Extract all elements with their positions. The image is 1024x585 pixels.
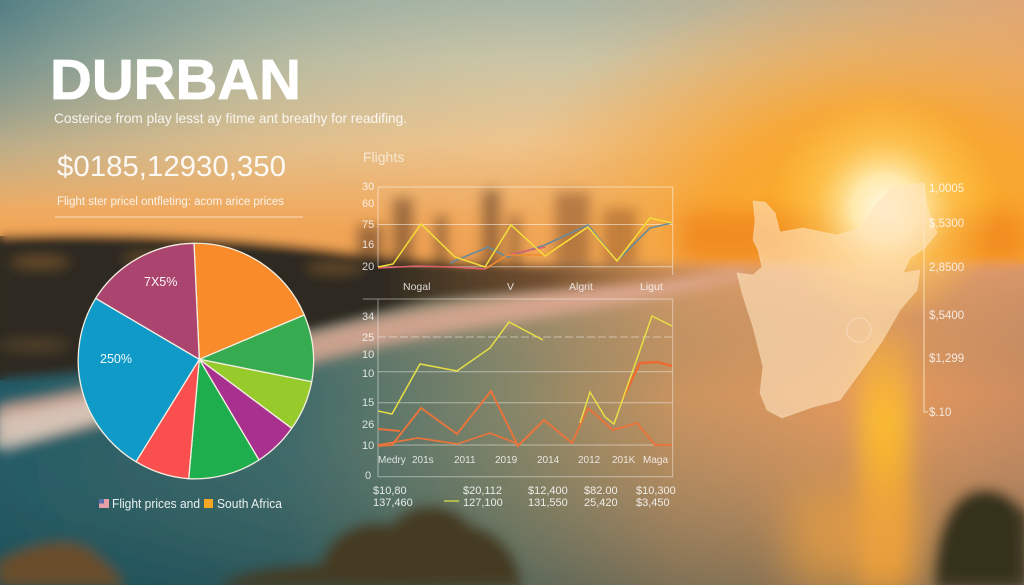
y axis labels: 10: [362, 440, 374, 452]
x axis labels: 201s: [412, 455, 434, 466]
map price scale: 1,0005: [929, 183, 964, 195]
x axis labels: 2012: [578, 455, 601, 466]
price table under chart: $20,112: [463, 485, 502, 497]
series: orange upper: [623, 362, 672, 398]
map price scale: $,5400: [929, 310, 964, 322]
y axis labels: [362, 311, 374, 482]
x axis labels: 2019: [495, 455, 518, 466]
price table under chart: $3,450: [636, 497, 670, 509]
series: yellow: [378, 218, 672, 267]
map price scale: $.10: [929, 407, 951, 419]
price table under chart: $12,400: [528, 485, 568, 497]
slice: purple: [199, 359, 292, 460]
y axis labels: 0: [365, 470, 371, 482]
pie legend: [99, 497, 282, 511]
pie legend: Flight prices and: [112, 497, 200, 511]
South Africa map: [737, 183, 937, 418]
pie label: maroon slice: 7X5%: [144, 275, 177, 289]
title: DURBAN: [50, 48, 301, 112]
x axis labels: 2014: [537, 455, 560, 466]
map price scale: 2,8500: [929, 262, 964, 274]
price table under chart: $10,300: [636, 485, 676, 497]
price table under chart: 127,100: [463, 497, 503, 509]
slice: green upper: [199, 315, 314, 382]
x axis labels: Ligut: [640, 281, 663, 293]
upper line chart heading: Flights: [363, 149, 404, 165]
series: orange thin: [378, 433, 518, 445]
x axis labels: [403, 281, 663, 293]
slice: lime: [199, 359, 312, 428]
series: orange stub: [378, 429, 400, 431]
y axis labels: 34: [362, 311, 374, 323]
map price scale: $1,299: [929, 353, 964, 365]
legend line: [444, 500, 459, 502]
slice: green lower: [189, 359, 259, 479]
slice: blue: [78, 298, 199, 462]
y axis labels: 15: [362, 397, 374, 409]
y axis labels: 60: [362, 198, 374, 210]
upper line chart: [362, 181, 673, 293]
series: yellow left: [378, 322, 543, 414]
icon: flag: [99, 499, 109, 508]
pie legend: South Africa: [217, 497, 282, 511]
series: yellow right: [580, 316, 672, 424]
icon: legend swatch: [204, 499, 213, 508]
x axis labels: V: [507, 281, 514, 293]
y axis labels: 30: [362, 181, 374, 193]
series: grey-blue: [450, 223, 672, 263]
map price scale: $,5300: [929, 218, 964, 230]
slice: maroon: [96, 243, 199, 359]
slice: red: [136, 359, 199, 479]
x axis labels: 2011: [454, 455, 476, 466]
price table under chart: 137,460: [373, 497, 413, 509]
x axis labels: Nogal: [403, 281, 430, 293]
price caption: Flight ster pricel ontfleting: acom arice prices: [57, 196, 284, 208]
map marker ring: [847, 318, 871, 342]
headline price: $0185,12930,350: [57, 151, 286, 183]
y axis labels: 26: [362, 419, 374, 431]
series: orange: [487, 218, 672, 268]
x axis labels: Maga: [643, 455, 668, 466]
y axis labels: 10: [362, 349, 374, 361]
y axis labels: 16: [362, 239, 374, 251]
y axis labels: 10: [362, 368, 374, 380]
pie chart: [78, 243, 314, 479]
y axis labels: 20: [362, 261, 374, 273]
price table under chart: $82.00: [584, 485, 618, 497]
price table under chart: 25,420: [584, 497, 618, 509]
price table under chart: 131,550: [528, 497, 568, 509]
map price scale: [924, 183, 964, 419]
slice: orange: [194, 243, 304, 359]
y axis labels: 75: [362, 219, 374, 231]
y axis labels: [362, 181, 374, 273]
lower line chart: [362, 299, 673, 482]
x axis labels: Algrit: [569, 281, 593, 293]
y axis labels: 25: [362, 332, 374, 344]
x axis labels: 201K: [612, 455, 636, 466]
price table under chart: $10,80: [373, 485, 407, 497]
x axis labels: Medry: [378, 455, 406, 466]
subtitle: Costerice from play lesst ay fitme ant breathy for readifing.: [54, 110, 407, 126]
price table under chart: [373, 485, 676, 509]
x axis labels: [378, 455, 668, 466]
pie label: blue slice: 250%: [100, 352, 132, 366]
series: red-pink: [378, 247, 545, 269]
series: orange main: [378, 391, 672, 446]
